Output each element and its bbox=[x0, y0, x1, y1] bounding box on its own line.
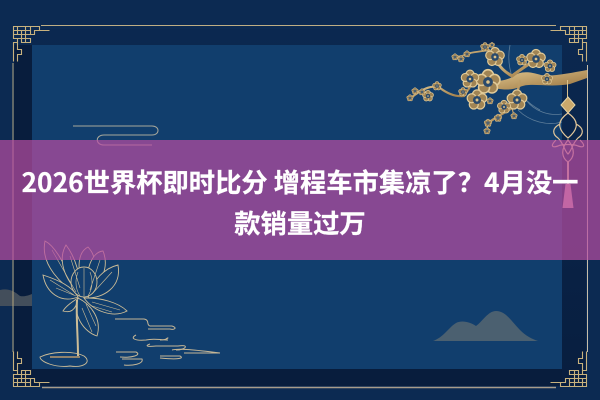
water ripple lines bbox=[115, 319, 220, 365]
cloud line ornament bbox=[73, 126, 158, 145]
hanging chinese knot bbox=[552, 80, 584, 208]
distant mountain bbox=[433, 311, 538, 341]
lotus flower bbox=[40, 241, 127, 366]
purple title band bbox=[0, 140, 600, 260]
corner knot top left bbox=[14, 26, 50, 62]
title: 款销量过万 bbox=[234, 202, 366, 241]
title bbox=[22, 161, 578, 241]
corner knot bottom right bbox=[550, 352, 586, 386]
corner knot bottom left bbox=[14, 352, 50, 386]
inner blue panel bbox=[32, 45, 562, 369]
plum blossom branch bbox=[407, 42, 587, 134]
left hill bbox=[0, 289, 32, 306]
shadow band left and bottom bbox=[14, 45, 562, 386]
corner knot top right bbox=[550, 26, 586, 62]
title: 2026世界杯即时比分 增程车市集凉了？4月没一 bbox=[22, 161, 578, 200]
